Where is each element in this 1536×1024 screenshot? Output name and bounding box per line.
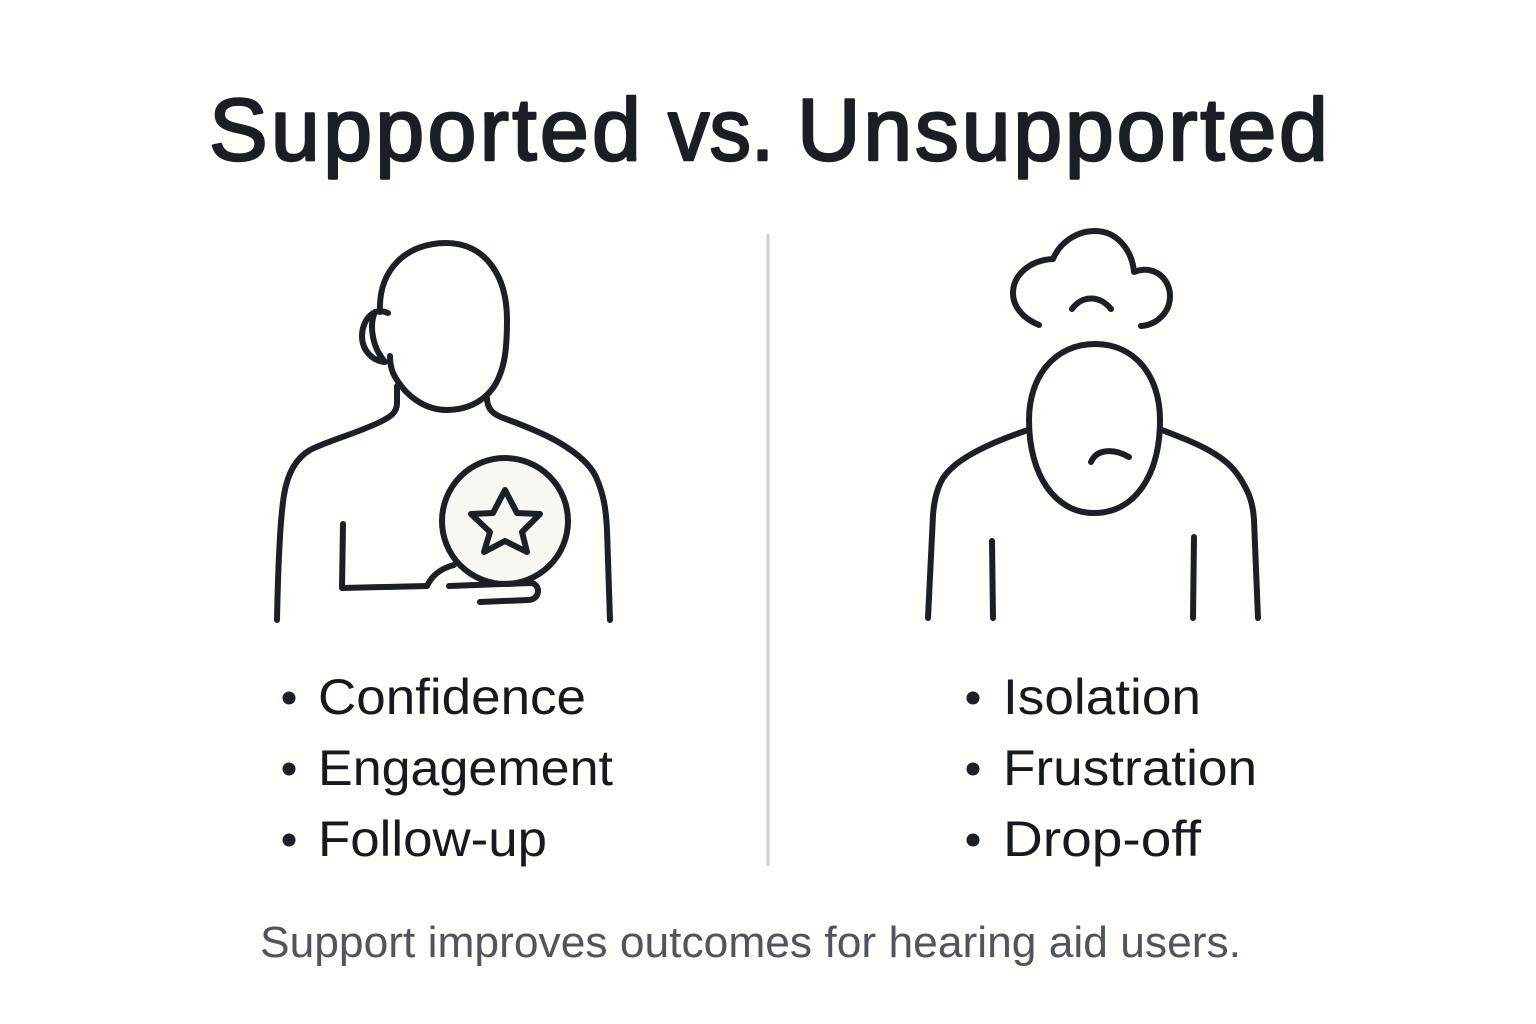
icon: supported person with star badge <box>277 243 610 620</box>
shoulders and torso outline <box>277 386 610 620</box>
head <box>380 243 507 410</box>
item: follow-up: Follow-up <box>318 811 547 867</box>
title <box>209 80 1328 179</box>
sad mouth <box>1091 451 1129 462</box>
list: unsupported outcomes <box>966 669 1257 867</box>
icon: unsupported person with cloud <box>928 231 1258 618</box>
arm lines <box>992 537 1194 618</box>
caption: Support improves outcomes for hearing aid users. <box>260 918 1241 967</box>
item: confidence: Confidence <box>318 669 586 725</box>
shoulders <box>928 430 1258 618</box>
bullet <box>966 692 980 704</box>
cloud frown <box>1072 298 1111 309</box>
star badge <box>442 458 568 584</box>
cloud <box>1013 231 1170 326</box>
item: drop-off: Drop-off <box>1003 811 1201 867</box>
item: frustration: Frustration <box>1003 740 1257 796</box>
title: Supported <box>209 80 641 179</box>
title: Unsupported <box>797 80 1328 179</box>
drooped head <box>1029 344 1160 513</box>
bullet <box>282 834 296 846</box>
title: vs. <box>668 80 774 179</box>
bullet <box>966 762 980 776</box>
list: supported outcomes <box>282 669 613 867</box>
item: isolation: Isolation <box>1003 669 1201 725</box>
bullet <box>966 834 980 846</box>
ear <box>362 311 388 362</box>
item: engagement: Engagement <box>318 740 613 796</box>
divider <box>766 234 770 866</box>
bullet <box>282 762 296 776</box>
bullet <box>282 692 296 704</box>
supporting arm and hand <box>342 524 538 602</box>
